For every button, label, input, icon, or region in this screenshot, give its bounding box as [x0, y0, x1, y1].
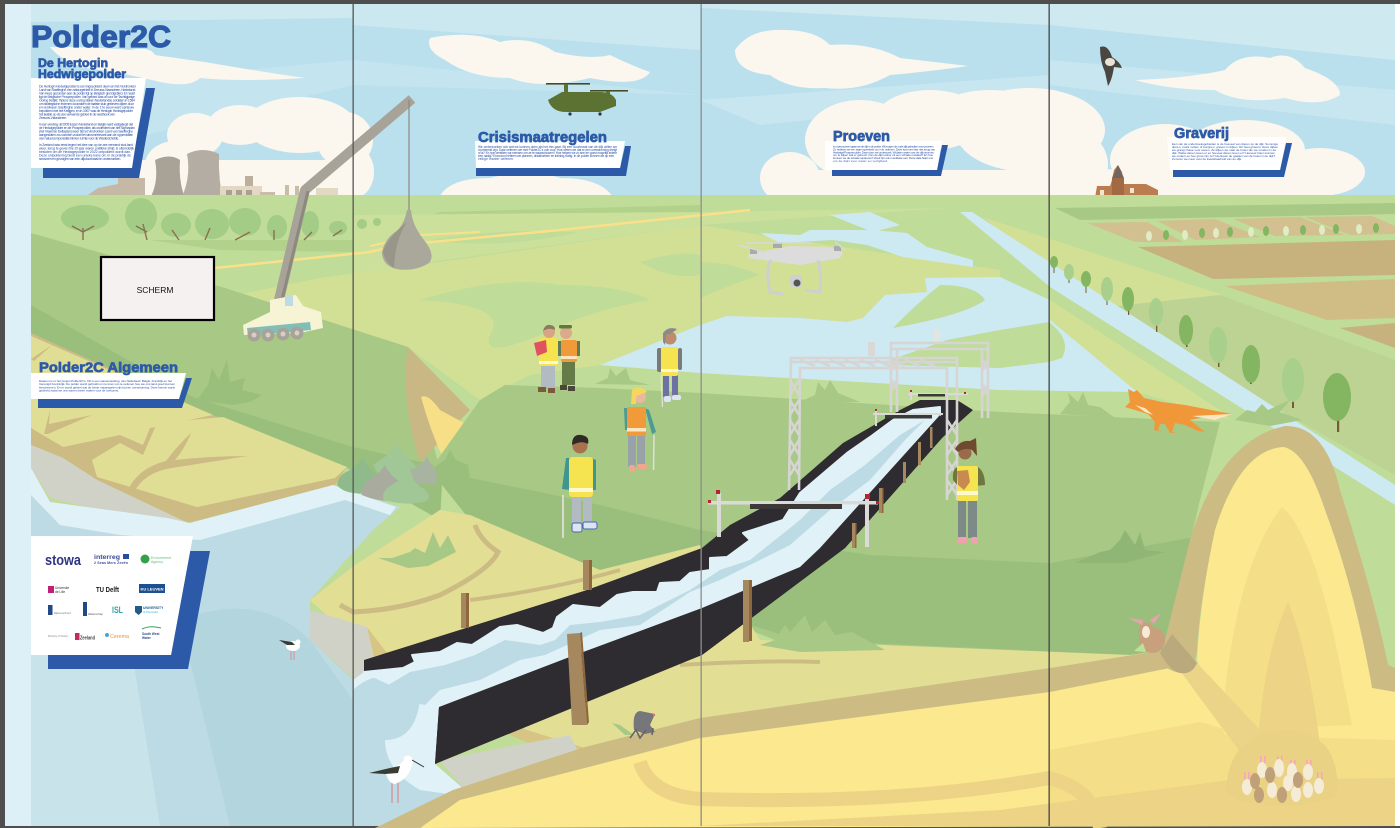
blue backing: [38, 378, 192, 408]
logo: stowa: stowa: [45, 552, 82, 569]
logo: environment agency: Agency: [151, 560, 163, 564]
crane truck and wrecking ball: [243, 99, 432, 342]
tree row left: [61, 198, 381, 240]
body text: De Hertogin Hedwigepolder is een ingepolderd deel van het Verdronken: [39, 84, 136, 88]
body text: weer, terug te geven the 20 jaar waren politieke strijd, is uiteindelijk: [39, 146, 134, 150]
person: grey hair with stick: [657, 328, 682, 407]
gantries: [789, 330, 988, 500]
panel: Polder2C intro: [31, 19, 171, 178]
body text: ligt de Belgische Prosperpolder. Van gebied was al voor de Tachtigjarige: [39, 95, 135, 99]
logo: interreg: 2 Seas Mers Zeeën: [94, 561, 128, 565]
measuring bars: [708, 390, 968, 547]
body text: aangesloten zou worden zodat het stroomrelevant aan de oppervlakte: [39, 133, 133, 137]
logo: environment agency: Environment: [151, 556, 171, 560]
body text: Zo leren we meer over de kwetsbaarheid van de dijk.: [1172, 157, 1242, 161]
right mound: [1160, 426, 1395, 805]
burrow rabbits: [1242, 756, 1324, 803]
heading: De Hertogin: De Hertogin: [38, 56, 108, 70]
logo: TU Delft: TU Delft: [96, 585, 119, 594]
person: officer: [558, 325, 580, 391]
body text: beschermen. En er wordt gekeel wat de beste maatregelen zijn bij een overstroming. Deze kennis wordt: [39, 385, 175, 389]
logo: South West Water: Water: [142, 636, 151, 640]
body text: bepolderd met het Kreijgen, en in 1907 was de Hertogin Hedwigepolder: [39, 109, 134, 113]
body text: Land van Saeftinghe, een natuurgebied in Zeeuws-Vlaanderen, Nederland.: [39, 88, 136, 92]
logo: South West Water: South West: [142, 632, 160, 636]
person: woman with clipboard: [953, 438, 985, 544]
logo: Cerema: Cerema: [110, 634, 129, 640]
body text: of is? En hoe bereiken we mensen om ze te waarschuwen? Hoe helpen we zo snel en goed mogelijk iedere: [478, 151, 617, 155]
logo: Zeeland: Zeeland: [80, 636, 95, 642]
logo: KU Leuven: KU LEUVEN: [140, 586, 164, 592]
title: Polder2C: [31, 19, 171, 54]
avenue trees: [1050, 223, 1379, 432]
fox: [1125, 389, 1232, 433]
logo: universite de lille: Université: [55, 586, 69, 590]
helicopter: [546, 83, 628, 116]
body text: Van Hees gezonden aan de polder ligt op Belgisch grondgebied. Er naast: [39, 92, 135, 96]
heading: Graverij: [1174, 126, 1229, 142]
body text: (het Vlaamse Deltaplan) weer bij het Verdronken Land van Saeftinghe: [39, 130, 133, 134]
body text: de Hedwigepolder en de Prosperpolder, als onderdeel van het Sigmaplan: [39, 126, 135, 130]
village: [1095, 165, 1158, 198]
white card: [31, 78, 146, 168]
panel: Proeven: [825, 129, 948, 176]
white card: [475, 141, 625, 168]
logo: universite de lille: de Lille: [55, 590, 65, 594]
blue backing: [476, 146, 631, 176]
eagle: [1100, 46, 1122, 86]
body text: om de dijkt voor water en veiligheid.: [833, 159, 888, 163]
body text: kunnen we de schade repareren? Zoek zijn ook meetdata voor. Deze data helpt ons: [833, 156, 934, 160]
body text: voorbereid zijn. Daar oefenen we met Polder2C's ook voor. Hoe weten we dat er een overstroming dreigt: [478, 148, 617, 152]
body text: we graag chase voor weten. Ze kijken we naar de holen die we vonden in de: [1172, 148, 1276, 152]
channel back wall and water: [364, 400, 973, 764]
logo: interreg: interreg: [94, 554, 120, 561]
white card: [31, 536, 193, 655]
blue backing: [43, 88, 155, 178]
body text: We onderzoeken ook wat we kunnen doen als het mis gaat. Bij een doorbraak van de dijk willen we: [478, 145, 617, 149]
logo: interreg: [94, 554, 129, 565]
blue backing: [48, 551, 210, 669]
bottom path and yellow fields: [375, 650, 1395, 828]
stilt bird large: [369, 756, 424, 803]
logo: South West Water: [142, 627, 161, 640]
logo: ministry A: [48, 605, 71, 615]
body text: besloten om de Hedwigepolder in 2022 ontpolderd wordt dan.: [39, 150, 131, 154]
body text: In een verdrag uit 2005 tussen Nederland en België werd vastgelegd dat: [39, 122, 133, 126]
blue backing: [832, 145, 948, 176]
right fields: [960, 195, 1395, 680]
person: man with book: [534, 325, 558, 393]
power plant: [85, 150, 338, 206]
river and ponds: [600, 212, 1137, 392]
logo: university: of Plymouth: [143, 610, 158, 614]
dike slope: [31, 233, 443, 520]
scherm screen: SCHERM: [137, 285, 173, 295]
heading: Hedwigepolder: Hedwigepolder: [38, 67, 126, 81]
white card: [825, 141, 942, 170]
logo: ministry B: Waterschap: [88, 612, 103, 616]
body text: Verenigd Koninkrijk. De polder wordt gebruikt om te leren om te oefenen hoe we ons land goed kunnen: [39, 382, 175, 386]
panel: partner logos: [31, 536, 210, 669]
logo: ISL: ISL: [112, 605, 123, 615]
mole: [612, 711, 655, 738]
body text: dijk. Welke dieren leven er en hoeveel dieren leven er? Hoeveel holen kunnen: [1172, 151, 1275, 155]
spiky grass tufts: [197, 360, 1302, 652]
blue backing: [1173, 143, 1292, 177]
central field: [430, 385, 1220, 655]
body text: In onze proeven gaan we de dijk in de polder. Wij mogen de oude dijk gebruiken voor proeven.: [833, 144, 934, 148]
green islands: [890, 285, 1065, 368]
body text: veilige manier oefenen.: [478, 157, 514, 161]
scherm screen: [101, 257, 214, 320]
water: [31, 468, 465, 826]
heading: Polder2C Algemeen: [39, 359, 178, 375]
section divider lines: [352, 4, 1050, 826]
body text: Hedwige/Prosperpolder. Daar doen we onderzoek. Wij laten water over de dijk stromen: [833, 150, 934, 154]
person: blonde with stick: [624, 387, 656, 472]
body text: om te kijken wat er gebeurt. Kan de dijk erdoor uit een schade ontstaat? En hoe: [833, 153, 933, 157]
logo: ministry A: Rijksoverheid: [54, 611, 71, 615]
body text: Zo hebben we een eigen speelveld om in te oefenen. Deze kommen hier niet terug van: [833, 147, 935, 151]
rabbit: [1128, 613, 1165, 653]
panel: Crisismaatregelen: [475, 129, 631, 176]
logo: Zeeland: [75, 633, 95, 642]
hillocks: [337, 443, 437, 504]
logo: university: [135, 606, 164, 615]
body text: Oorlog bedijkt. Tijdens deze oorlog staken Nederlandse soldaten in 1584: [39, 98, 135, 102]
body text: van natuurcompensatie binnen ruimte voor de Westerschelde.: [39, 136, 119, 140]
stilt bird small: [279, 640, 300, 660]
polder land base: [31, 195, 1395, 826]
brown wedge and hill: [406, 347, 470, 462]
heading: Crisismaatregelen: [478, 129, 607, 146]
white card: [1167, 137, 1286, 170]
body text: [39, 379, 175, 393]
panel: Graverij: [1167, 126, 1292, 177]
logo: ministry B: [83, 602, 103, 616]
body text: gedeeld zodat we ons samen beter maken voor de toekomst.: [39, 389, 119, 393]
body text: sensoren en gevolgen van een dijkdoorbraak te onderzoeken.: [39, 157, 121, 161]
body text: Zeeuws-Vlaanderen.: [39, 116, 67, 120]
white card: [31, 373, 186, 399]
body text: en verdween Saeftinghe onder water. In de 17e eeuw werd opnieuw: [39, 106, 134, 110]
panel: Polder2C Algemeen: [31, 359, 192, 408]
logo: universite de lille: [48, 586, 69, 594]
body text: Deze ontpoldering biedt een unieke kans om in de praktijk de: [39, 154, 131, 158]
logo: environment agency: [140, 554, 171, 564]
body text: In Zeeland was eerst tegen het idee van op de zee verwend stuk land: [39, 143, 133, 147]
body text: [833, 144, 935, 163]
heading: Proeven: [833, 129, 890, 145]
body text: we onders en hoe groot zijn ze? Hierlopen de gaatjes van de holen in de dijk?: [1172, 154, 1275, 158]
logo: KU Leuven: [139, 584, 165, 593]
clouds: [50, 30, 1365, 204]
body text: een nadig? Enzovoor hebben we plannen, draaiboeken en training nodig. In de polder kunnen we op een: [478, 154, 614, 158]
body text: [1172, 142, 1278, 161]
sky: [31, 4, 1395, 196]
body text: het laatste op de zee verwende gebied in de westhoek van: [39, 112, 115, 116]
lime plateaus and tan paths: [31, 333, 1165, 790]
logo: public works: Ministry of Works: [48, 634, 69, 638]
body text: Een van de onderzoeksgebieden is de hoeveel van dieren op de dijk. Sommige: [1172, 142, 1278, 146]
body text: [478, 145, 617, 161]
body text: dieren, zoals mollen of konijnen, graven in dijken. Dit heet graverij. Deze dijken: [1172, 145, 1278, 149]
body text: om strategische redenen doorzaken de laatste stuk gebleven dijken door: [39, 102, 135, 106]
drone: [738, 242, 845, 294]
person: man front: [562, 435, 597, 538]
logo: Cerema: [105, 633, 129, 640]
body text: [39, 84, 136, 161]
wooden posts: [461, 427, 932, 725]
body text: Daarom is er het project Polder2C's. Dit is een samenwerking, van Nederland, België, Frankrijk en het: [39, 379, 172, 383]
logo: university: UNIVERSITY: [143, 606, 164, 610]
